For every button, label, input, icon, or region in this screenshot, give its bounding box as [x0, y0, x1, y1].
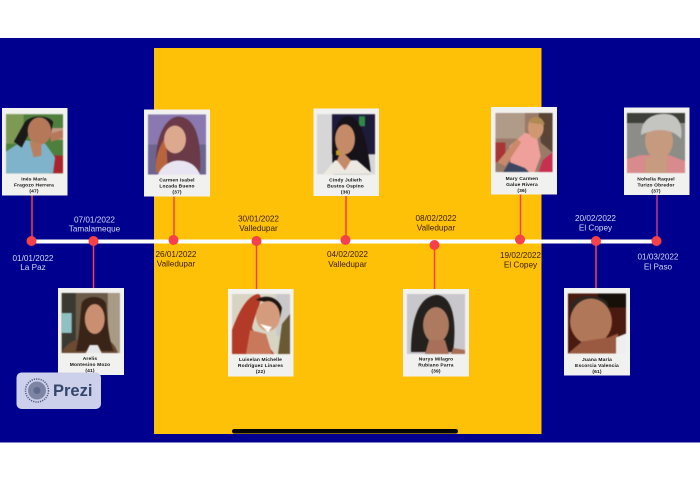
card: Carmen Isabel Lozada Bueno: Carmen Isabel	[159, 178, 195, 184]
timeline dots	[26, 234, 662, 250]
card: Inés María Fragozo Herrera: (47)	[29, 188, 39, 194]
date label: 08/02/2022 Valledupar: 08/02/2022	[416, 214, 457, 223]
icon: Prezi logo	[26, 379, 48, 402]
card: Mary Carmen Galue Rivera: Galue Rivera	[506, 182, 538, 188]
date label: 01/01/2022 La Paz: 01/01/2022	[13, 254, 54, 263]
date label: 04/02/2022 Valledupar: Valledupar	[328, 260, 367, 269]
yellow central panel	[154, 48, 542, 434]
card: Mary Carmen Galue Rivera	[491, 107, 557, 194]
card: Cindy Julieth Bustos Ospino: Cindy Julieth	[329, 178, 362, 184]
date label: 01/03/2022 El Paso	[638, 252, 679, 272]
date label: 07/01/2022 Tamalameque: Tamalameque	[69, 224, 121, 234]
date label: 01/03/2022 El Paso: 01/03/2022	[638, 252, 679, 262]
connector lines	[32, 194, 657, 290]
date label: 01/03/2022 El Paso: El Paso	[644, 262, 673, 272]
date label: 20/02/2022 El Copey	[575, 214, 616, 232]
date label: 07/01/2022 Tamalameque: 07/01/2022	[74, 216, 115, 224]
card: Inés María Fragozo Herrera	[2, 108, 68, 196]
date label: 04/02/2022 Valledupar	[327, 250, 368, 269]
card: Inés María Fragozo Herrera: Fragozo Herrera	[14, 182, 54, 188]
card: Mary Carmen Galue Rivera: (36)	[517, 188, 527, 194]
card: Luiselan Michelle Rodríguez Linares: Rodríguez Linares	[238, 363, 283, 369]
date label: 20/02/2022 El Copey: El Copey	[579, 224, 613, 232]
date label: 26/01/2022 Valledupar: 26/01/2022	[156, 250, 197, 259]
date label: 01/01/2022 La Paz	[13, 254, 54, 272]
card: Nurys Milagro Rubiano Parra: Nurys Milagro	[419, 356, 453, 362]
card: Nohelia Raquel Turizo Obredor	[624, 108, 690, 195]
card: Nohelia Raquel Turizo Obredor: Nohelia Raquel	[637, 176, 675, 182]
card: Cindy Julieth Bustos Ospino: (36)	[341, 190, 350, 196]
date label: 30/01/2022 Valledupar: Valledupar	[239, 224, 278, 233]
card: Arelis Montesino Mozo: (41)	[85, 368, 95, 374]
card: Carmen Isabel Lozada Bueno: (37)	[172, 190, 182, 196]
card: Nohelia Raquel Turizo Obredor: (37)	[651, 188, 661, 194]
card: Arelis Montesino Mozo: Montesino Mozo	[70, 362, 110, 368]
date label: 20/02/2022 El Copey: 20/02/2022	[575, 214, 616, 223]
card: Inés María Fragozo Herrera: Inés María	[21, 176, 47, 182]
date label: 26/01/2022 Valledupar: Valledupar	[157, 260, 196, 268]
card: Arelis Montesino Mozo: Arelis	[83, 356, 97, 362]
card: Carmen Isabel Lozada Bueno	[144, 110, 210, 196]
date label: 26/01/2022 Valledupar	[156, 250, 197, 268]
card: Luiselan Michelle Rodríguez Linares: (22)	[256, 369, 265, 375]
card: Mary Carmen Galue Rivera: Mary Carmen	[506, 176, 538, 182]
card: Cindy Julieth Bustos Ospino: Bustos Ospino	[327, 184, 364, 190]
card: Arelis Montesino Mozo	[58, 288, 124, 375]
date label: 08/02/2022 Valledupar	[416, 214, 457, 232]
date label: 19/02/2022 El Copey: El Copey	[504, 260, 538, 270]
card: Nohelia Raquel Turizo Obredor: Turizo Obredor	[637, 182, 675, 188]
Prezi badge: Prezi	[53, 382, 92, 400]
card: Luiselan Michelle Rodríguez Linares	[228, 289, 294, 376]
date label: 04/02/2022 Valledupar: 04/02/2022	[327, 250, 368, 259]
date label: 30/01/2022 Valledupar: 30/01/2022	[238, 214, 279, 224]
date label: 30/01/2022 Valledupar	[238, 214, 279, 233]
date label: 01/01/2022 La Paz: La Paz	[20, 263, 46, 272]
card: Carmen Isabel Lozada Bueno: Lozada Bueno	[159, 184, 195, 190]
card: Juana María Escorcia Valencia	[564, 288, 630, 376]
date label: 07/01/2022 Tamalameque	[69, 216, 121, 234]
card: Nurys Milagro Rubiano Parra: Rubiano Parra	[418, 362, 454, 368]
date label: 19/02/2022 El Copey	[500, 251, 541, 270]
card: Juana María Escorcia Valencia: (61)	[592, 369, 602, 375]
black scroll bar	[232, 429, 458, 434]
card: Cindy Julieth Bustos Ospino	[314, 108, 379, 196]
card: Luiselan Michelle Rodríguez Linares: Luiselan Michelle	[239, 357, 282, 363]
Prezi badge	[16, 372, 101, 409]
date label: 19/02/2022 El Copey: 19/02/2022	[500, 251, 541, 260]
card: Nurys Milagro Rubiano Parra: (39)	[431, 368, 441, 374]
card: Juana María Escorcia Valencia: Escorcia Valencia	[575, 363, 619, 369]
timeline axis	[31, 240, 656, 244]
date label: 08/02/2022 Valledupar: Valledupar	[417, 224, 456, 232]
card: Juana María Escorcia Valencia: Juana María	[582, 357, 612, 363]
card: Nurys Milagro Rubiano Parra	[403, 289, 469, 376]
